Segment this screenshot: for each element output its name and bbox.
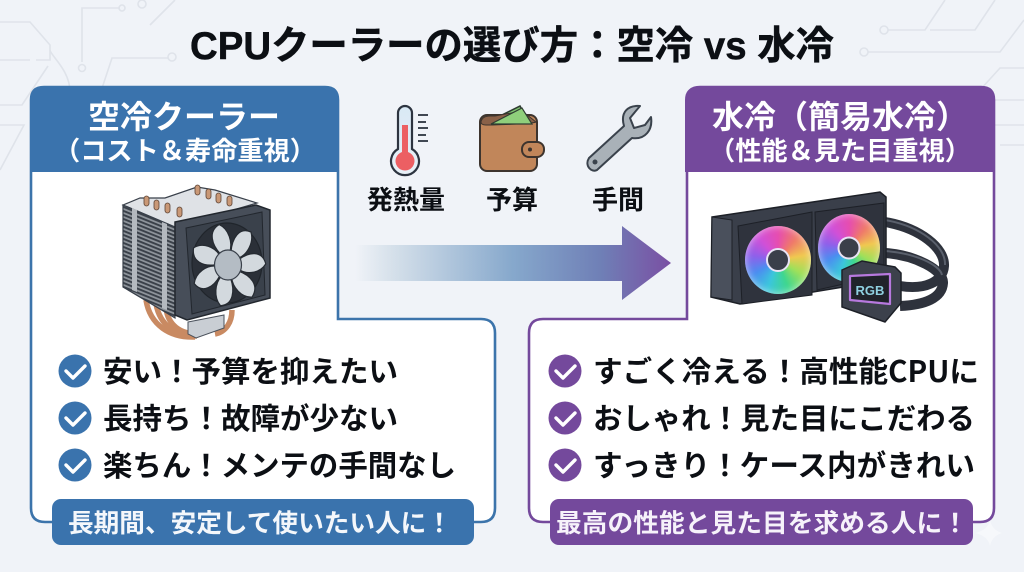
- item 1: 安い！予算を抑えたい: [103, 349, 398, 391]
- icon: thermometer: [391, 106, 428, 175]
- callout: air cooler: 長期間、安定して使いたい人に！: [68, 503, 452, 540]
- icon: wallet: [480, 106, 544, 171]
- fan opening: [192, 223, 262, 303]
- pump label: RGB: [856, 283, 884, 298]
- illustration: tower air cooler: [123, 185, 270, 338]
- fan 2 hub: [838, 238, 860, 258]
- label: budget: 予算: [486, 180, 538, 217]
- item 1: すごく冷える！高性能CPUに: [593, 349, 979, 391]
- item 3: すっきり！ケース内がきれい: [593, 443, 975, 485]
- panel body: air cooler: [31, 87, 495, 522]
- fan blades: [192, 223, 267, 307]
- item 2: おしゃれ！見た目にこだわる: [593, 396, 975, 438]
- panel: water cooler: [529, 87, 995, 545]
- heat pipe tips: [144, 185, 232, 217]
- RGB fan 1: [745, 226, 811, 294]
- watermark sparkle: [975, 520, 1002, 546]
- fan frame: [175, 205, 270, 320]
- fan 1 hub: [767, 249, 789, 271]
- header text: water cooler: [709, 92, 971, 168]
- RGB fan 2: [818, 214, 880, 282]
- checklist: water cooler: [548, 349, 979, 485]
- header text: air cooler: 空冷クーラー: [88, 92, 280, 138]
- illustration: AIO liquid cooler: [711, 192, 945, 322]
- header text: air cooler: （コスト＆寿命重視）: [54, 131, 316, 168]
- header text: water cooler: （性能＆見た目重視）: [709, 131, 971, 168]
- arrow: [355, 226, 671, 300]
- panel body: water cooler: [529, 87, 994, 522]
- header text: air cooler: [54, 92, 316, 168]
- heatsink top: [123, 187, 257, 227]
- panel header: water cooler: [685, 87, 995, 172]
- item 2: 長持ち！故障が少ない: [103, 396, 398, 438]
- decision factors: [367, 106, 651, 217]
- pump block: [842, 261, 901, 322]
- panel header: air cooler: [30, 87, 339, 172]
- label: heat output: 発熱量: [367, 180, 445, 217]
- radiator: [711, 192, 886, 304]
- heatsink fins: [123, 205, 175, 318]
- tubes: [885, 222, 944, 306]
- circuit pattern background: [0, 0, 1024, 172]
- icon: wrench: [587, 106, 651, 171]
- title: CPUクーラーの選び方：空冷 vs 水冷: [190, 25, 834, 68]
- fan hub: [214, 250, 242, 280]
- callout: water cooler: 最高の性能と見た目を求める人に！: [556, 503, 968, 540]
- panel: air cooler: [30, 87, 495, 545]
- heat pipes bottom: [146, 300, 232, 337]
- item 3: 楽ちん！メンテの手間なし: [103, 443, 456, 485]
- checklist: air cooler: [58, 349, 456, 485]
- mounting base: [188, 315, 224, 338]
- label: effort: 手間: [592, 180, 644, 217]
- header text: water cooler: 水冷（簡易水冷）: [712, 92, 968, 138]
